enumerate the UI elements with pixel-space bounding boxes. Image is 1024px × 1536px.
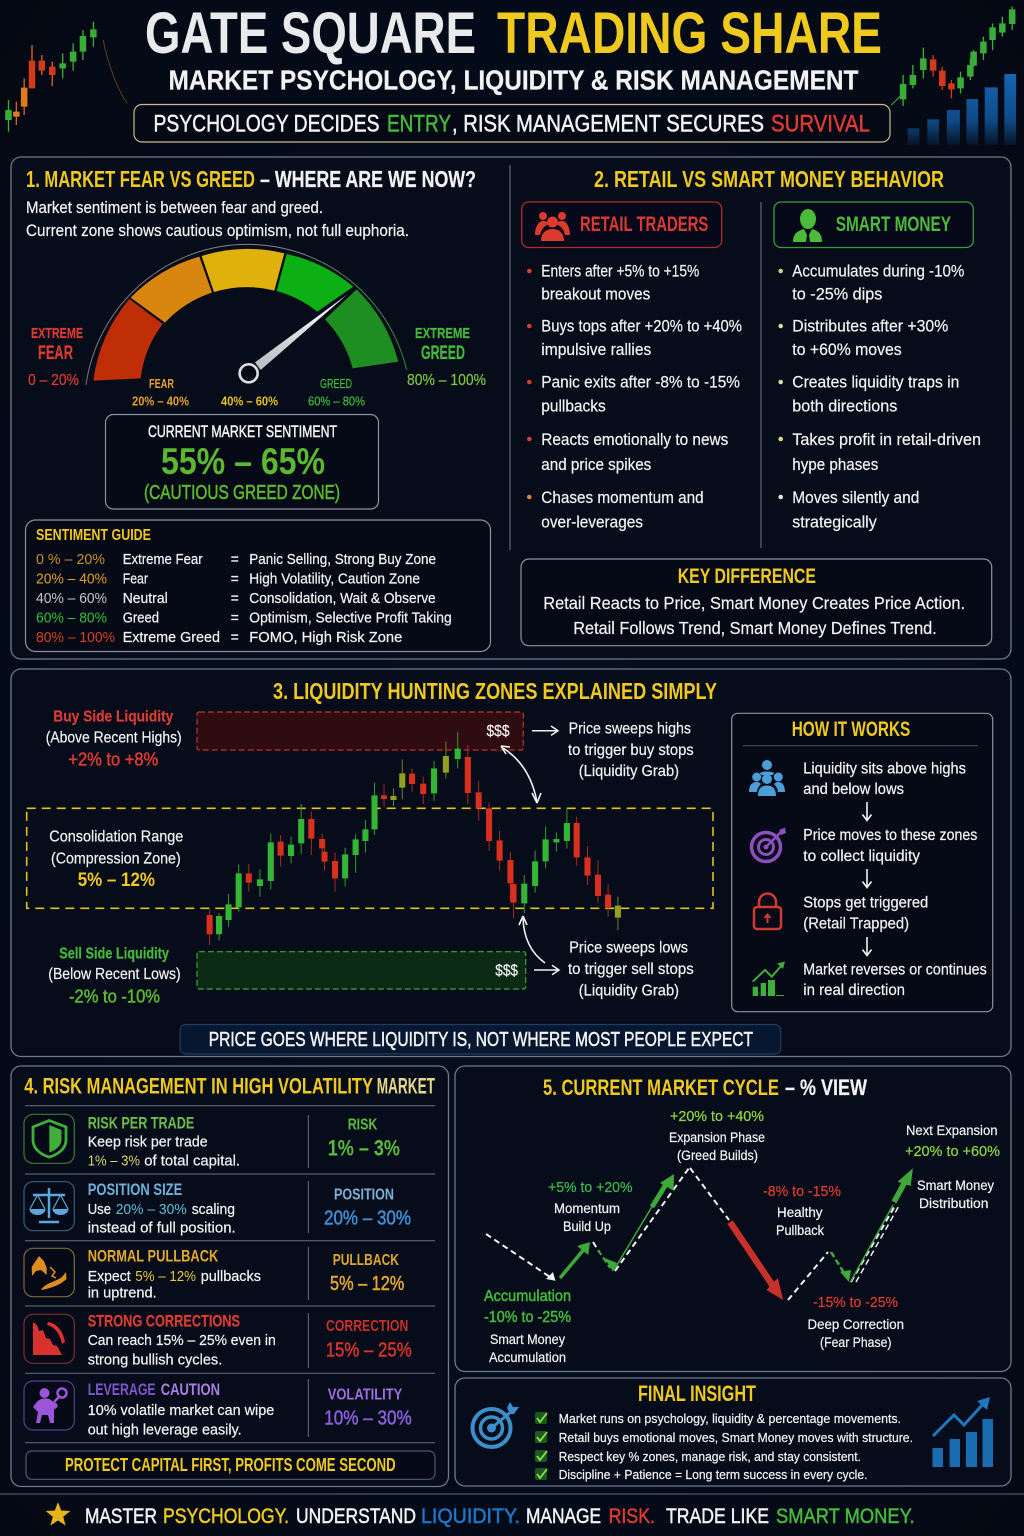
retail traders list: breakout moves [541,286,650,304]
checklist: Respect key % zones, manage risk, and stay consistent. [559,1449,861,1464]
row: risk per trade [24,1113,400,1170]
needle [240,295,347,382]
sentiment guide table: FOMO, High Risk Zone [249,630,402,646]
panel: fear greed and retail vs smart money [11,157,1011,659]
sell side zone: $$$ [495,962,518,980]
retail traders badge [522,202,722,248]
subtitle: MARKET PSYCHOLOGY, LIQUIDITY & RISK MANAGEMENT [168,64,858,96]
cycle label: next expansion: Next Expansion [906,1123,998,1138]
arrow: to highs note [532,726,558,735]
heading: section 1: 1. MARKET FEAR VS GREED [26,166,255,192]
smart money list: hype phases [792,456,878,474]
smart money list: to -25% dips [792,286,882,304]
smart money list: Creates liquidity traps in [792,374,959,392]
gauge labels: FEAR [38,343,73,364]
row: strong corrections: Can reach 15% – 25% even in [88,1332,276,1349]
consolidation range label: Consolidation Range [49,829,183,846]
footer divider [0,1493,1024,1495]
cycle label: accumulation: Accumulation [484,1288,571,1305]
icon: purple target [752,828,786,862]
sentiment guide table: High Volatility, Caution Zone [249,572,420,588]
row: position size: POSITION SIZE [88,1180,182,1199]
footer banner: RISK. [609,1505,655,1528]
smart money list: Takes profit in retail-driven [792,431,981,449]
cycle path [486,1168,913,1300]
note: price sweeps lows: Price sweeps lows [569,939,688,956]
candlestick chart [207,732,621,945]
heading: final insight: FINAL INSIGHT [638,1381,756,1406]
row: risk per trade: Keep risk per trade [88,1134,208,1151]
current market sentiment box: CURRENT MARKET SENTIMENT [148,422,337,441]
buy side zone: $$$ [486,723,510,740]
sentiment guide table: = [231,630,239,646]
row: strong corrections: 15% – 25% [326,1340,412,1362]
how it works steps: Liquidity sits above highs [803,760,966,777]
retail traders list: Enters after +5% to +15% [541,263,700,281]
panel: current market cycle [455,1066,1011,1372]
gauge labels: EXTREME [31,325,83,342]
buy side liquidity label: +2% to +8% [68,750,158,770]
note: price sweeps lows: (Liquidity Grab) [579,982,679,999]
current market sentiment box: 55% – 65% [161,441,325,482]
consolidation range label: 5% – 12% [78,870,155,891]
cycle label: momentum [548,1180,633,1234]
arrows: step flow [862,802,872,956]
smart money list: both directions [792,398,897,416]
tagline box: ENTRY [387,111,451,138]
gauge labels: FEAR [149,376,174,391]
footer banner: TRADE LIKE [666,1505,769,1528]
gauge labels: GREED [421,343,465,364]
current market sentiment box [106,414,378,509]
retail traders list: and price spikes [541,456,651,474]
note: price sweeps highs: (Liquidity Grab) [579,763,679,780]
row: risk per trade: 1% – 3% [88,1153,140,1170]
row: leverage caution: CAUTION [161,1380,220,1399]
row: normal pullback: PULLBACK [333,1252,399,1269]
title [145,1,882,66]
arrow: momentum up [560,1242,590,1278]
icon: shield [33,1120,66,1157]
sentiment guide table: = [231,611,239,627]
sentiment guide table: Optimism, Selective Profit Taking [249,611,452,627]
gauge labels: 20% – 40% [132,394,189,408]
heading: section 5: – % VIEW [785,1075,867,1100]
how it works steps: to collect liquidity [803,848,920,865]
sell side liquidity label: Sell Side Liquidity [59,945,169,962]
icon: people [749,760,785,796]
cycle label: deep correction: -15% to -25% [813,1295,898,1311]
header candlestick chart left [5,22,127,132]
sentiment guide table: 0 % – 20% [36,552,105,568]
sentiment guide table [26,520,490,652]
panel: final insight [455,1378,1011,1486]
retail traders list: Panic exits after -8% to -15% [541,374,740,392]
tagline box: PSYCHOLOGY DECIDES [154,111,380,138]
arrow: small dip [598,1250,617,1272]
retail traders list: Chases momentum and [541,489,704,507]
sentiment guide table: = [231,591,239,607]
key difference box: KEY DIFFERENCE [678,565,816,588]
note: price sweeps highs: to trigger buy stops [568,742,694,759]
row: strong corrections: strong bullish cycles. [88,1351,222,1368]
icon: falling chart [33,1322,65,1355]
gauge labels [28,325,486,408]
cycle label: momentum: +5% to +20% [548,1180,633,1196]
cycle label: next expansion: Distribution [919,1196,988,1211]
note: price sweeps highs: Price sweeps highs [569,720,691,737]
header candlestick chart right with blue bars [891,7,1016,145]
footer banner: PSYCHOLOGY. [163,1505,289,1528]
heading: section 5: 5. CURRENT MARKET CYCLE [543,1075,779,1100]
title: GATE SQUARE [145,1,476,66]
sell side liquidity label: (Below Recent Lows) [48,966,181,983]
gauge labels: 40% – 60% [221,394,278,408]
intro text: Current zone shows cautious optimism, not full euphoria. [26,222,409,240]
key difference box: Retail Follows Trend, Smart Money Defines Trend. [573,618,937,638]
checklist [535,1411,913,1482]
retail traders badge: RETAIL TRADERS [580,213,708,236]
row: position size: Use [88,1201,111,1218]
cycle label: expansion: (Greed Builds) [677,1148,758,1163]
sentiment guide table: Panic Selling, Strong Buy Zone [249,552,436,568]
cycle label: momentum: Momentum [554,1201,620,1216]
sentiment guide table: Fear [123,572,148,588]
footer banner: MASTER [85,1505,157,1528]
cycle label: expansion [669,1109,765,1163]
sell side zone [197,952,526,989]
gauge chart [86,244,407,385]
buy side liquidity label: Buy Side Liquidity [53,709,173,726]
retail traders list: over-leverages [541,514,643,532]
footer banner: UNDERSTAND [296,1505,416,1528]
gauge labels: GREED [320,376,352,391]
row: strong corrections: STRONG CORRECTIONS [88,1312,240,1331]
intro text [26,199,409,240]
sell side liquidity label [48,945,181,1006]
smart money list: Moves silently and [792,489,919,507]
sentiment guide table: Neutral [123,591,168,607]
buy side liquidity label: (Above Recent Highs) [46,730,182,747]
row: risk per trade: RISK [348,1116,378,1133]
row: position size: POSITION [334,1186,394,1203]
cycle label: accumulation [484,1288,571,1365]
smart money list [778,263,981,532]
footer banner: SMART MONEY. [776,1505,915,1528]
icon: blue growth chart [932,1397,993,1467]
retail traders list: Buys tops after +20% to +40% [541,318,742,336]
how it works steps: Market reverses or continues [803,961,987,978]
current market sentiment box: (CAUTIOUS GREED ZONE) [144,482,340,504]
smart money badge: SMART MONEY [836,213,951,236]
heading: section 3: 3. LIQUIDITY HUNTING ZONES EXPLAINED SIMPLY [273,678,717,704]
retail traders list: pullbacks [541,398,606,416]
tagline box: SURVIVAL [771,111,870,138]
icon: leverage figure [33,1388,66,1423]
panel: liquidity hunting zones [11,669,1011,1056]
gauge labels: 0 – 20% [28,372,79,389]
retail traders list: impulsive rallies [541,341,651,359]
icon: scales [30,1188,68,1222]
arrow: deep correction down [730,1222,783,1300]
cycle label: next expansion: Smart Money [917,1178,994,1193]
icon: green chart [753,962,785,996]
arrow: bottom sweep curve [519,916,545,963]
consolidation zone [27,808,713,908]
cycle label: healthy pullback [763,1184,841,1238]
callout: price goes where liquidity is: PRICE GOES WHERE LIQUIDITY IS, NOT WHERE MOST PEOPLE EXPECT [209,1029,753,1051]
cycle label: healthy pullback: -8% to -15% [763,1184,841,1200]
title: TRADING SHARE [497,1,882,66]
sentiment guide table: 40% – 60% [36,591,107,607]
retail traders list: Reacts emotionally to news [541,431,728,449]
arrow: to lows note [534,965,559,975]
icon: businessman [793,209,822,242]
footer banner: MANAGE [526,1505,601,1528]
row: leverage caution: out high leverage easily. [88,1421,242,1438]
how it works steps: and below lows [803,781,904,798]
cycle label: deep correction: Deep Correction [808,1317,904,1332]
retail traders list [527,263,742,532]
cycle label: accumulation: Accumulation [489,1350,566,1365]
row: position size [24,1180,411,1236]
how it works panel [732,713,993,1012]
heading: section 4: 4. RISK MANAGEMENT IN HIGH VOLATILITY [24,1073,373,1098]
callout: protect capital [26,1451,435,1479]
row: normal pullback: Expect [88,1268,131,1285]
tagline box: , RISK MANAGEMENT SECURES [452,111,764,138]
sentiment guide table: Greed [123,611,159,627]
cycle label: next expansion [905,1123,1000,1211]
gauge labels: 80% – 100% [407,372,486,389]
heading: section 1: – WHERE ARE WE NOW? [260,166,476,192]
how it works panel: HOW IT WORKS [792,718,910,741]
buy side zone [197,712,523,750]
row: normal pullback [24,1247,404,1302]
smart money list: strategically [792,514,877,532]
sentiment guide table: Extreme Greed [123,630,220,646]
cycle label: expansion: +20% to +40% [670,1109,764,1125]
tagline box [134,104,890,142]
cycle label: healthy pullback: Healthy [777,1205,823,1220]
footer banner [46,1502,915,1528]
smart money badge [774,202,973,248]
how it works steps: Stops get triggered [803,894,928,911]
row: leverage caution: 10% volatile market can wipe [88,1402,274,1419]
checklist: Retail buys emotional moves, Smart Money moves with structure. [559,1430,913,1445]
row: normal pullback: pullbacks [201,1268,261,1285]
how it works steps: (Retail Trapped) [803,915,909,932]
sentiment guide table: 80% – 100% [36,630,115,646]
cycle label: expansion: Expansion Phase [669,1130,765,1145]
smart money list: to +60% moves [792,341,902,359]
arrow: expansion up [614,1174,674,1270]
smart money list: Accumulates during -10% [792,263,965,281]
cycle label: accumulation: Smart Money [490,1332,565,1347]
consolidation range label: (Compression Zone) [51,850,181,867]
note: price sweeps lows: to trigger sell stops [568,961,694,978]
note: price sweeps lows [568,939,694,999]
row: leverage caution: LEVERAGE [88,1380,156,1399]
row: risk per trade: RISK PER TRADE [88,1113,194,1132]
row: normal pullback: in uptrend. [88,1285,157,1302]
row: position size: scaling [192,1201,235,1218]
heading: section 4: MARKET [377,1073,435,1098]
cycle label: accumulation: -10% to -25% [484,1309,571,1326]
icon: gold star [46,1502,70,1526]
cycle label: deep correction [808,1295,904,1350]
row: position size: 20% – 30% [324,1207,411,1229]
checklist: Discipline + Patience = Long term success in every cycle. [559,1467,868,1482]
row: risk per trade: of total capital. [144,1153,240,1170]
icon: blue target [472,1402,519,1447]
sentiment guide table: = [231,572,239,588]
key difference box: Retail Reacts to Price, Smart Money Creates Price Action. [543,593,965,613]
gauge labels: EXTREME [415,325,470,342]
row: leverage caution: 10% – 30% [324,1407,412,1429]
callout: price goes where liquidity is [180,1024,781,1054]
how it works steps: in real direction [803,982,905,999]
smart money list: Distributes after +30% [792,318,949,336]
intro text: Market sentiment is between fear and greed. [26,199,323,217]
sell side liquidity label: -2% to -10% [69,986,160,1006]
icon: retail people [535,212,570,241]
sentiment guide table: Consolidation, Wait & Observe [249,591,436,607]
gauge labels: 60% – 80% [308,394,365,408]
how it works steps [803,760,987,999]
footer banner: LIQUIDITY. [421,1505,520,1528]
icon: pullback [32,1256,66,1290]
cycle label: deep correction: (Fear Phase) [820,1335,892,1350]
sentiment guide table: 20% – 40% [36,572,107,588]
icon: lock [754,894,781,929]
arrow: top sweep curve [501,746,541,803]
row: leverage caution [24,1380,412,1438]
row: risk per trade: 1% – 3% [328,1136,400,1161]
panel: risk management [11,1066,448,1486]
cycle label: momentum: Build Up [563,1219,611,1234]
row: strong corrections [24,1312,412,1368]
key difference box [521,559,992,646]
sentiment guide table: 60% – 80% [36,611,107,627]
callout: protect capital: PROTECT CAPITAL FIRST, PROFITS COME SECOND [65,1455,396,1475]
row: position size: 20% – 30% [116,1201,187,1218]
arrow: pullback down [831,1252,851,1282]
row: normal pullback: 5% – 12% [135,1268,196,1285]
cycle label: healthy pullback: Pullback [776,1223,824,1238]
note: price sweeps highs [568,720,694,780]
row: normal pullback: 5% – 12% [330,1273,404,1295]
row: strong corrections: CORRECTION [326,1318,408,1335]
sentiment guide table: = [231,552,239,568]
row: normal pullback: NORMAL PULLBACK [88,1247,219,1266]
cycle label: next expansion: +20% to +60% [905,1144,1000,1160]
sentiment guide table: SENTIMENT GUIDE [36,527,151,544]
how it works steps: Price moves to these zones [803,827,978,844]
checklist: Market runs on psychology, liquidity & percentage movements. [559,1411,901,1426]
sentiment guide table: Extreme Fear [123,552,203,568]
buy side liquidity label [46,709,182,770]
consolidation range label [49,829,183,891]
row: position size: instead of full position. [88,1219,236,1236]
arrow: next expansion up [851,1168,913,1281]
row: leverage caution: VOLATILITY [328,1386,403,1403]
